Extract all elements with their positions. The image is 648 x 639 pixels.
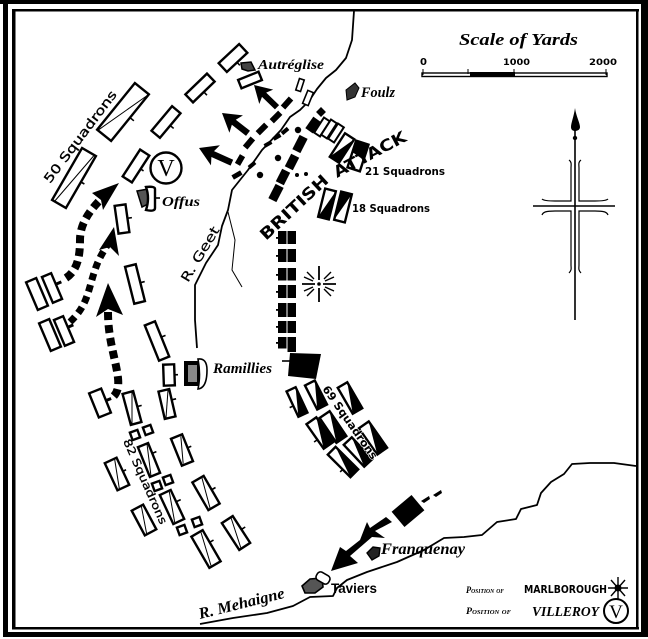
attack arrows: left wing	[66, 183, 123, 397]
village: Offus	[137, 187, 201, 211]
marker: Villeroy position: V	[157, 156, 175, 182]
label: R. Geet: R. Geet	[179, 224, 223, 285]
British squadrons: 69 squadrons	[283, 380, 387, 480]
village: Offus: Offus	[162, 195, 201, 210]
legend: VILLEROY	[532, 605, 600, 620]
scale of yards: 1000	[503, 58, 530, 68]
label: R. Mehaigne: R. Mehaigne	[196, 585, 286, 623]
label: 69 squadrons: 69 Squadrons	[320, 383, 380, 462]
marker: Villeroy position	[150, 152, 182, 184]
legend: Position of	[466, 585, 504, 595]
river Geet	[179, 11, 354, 348]
village: Taviers: Taviers	[331, 580, 377, 596]
British infantry columns	[276, 231, 296, 352]
village: Foulz: Foulz	[360, 85, 395, 101]
French cavalry: left wing	[26, 204, 178, 417]
label: 82 squadrons: 82 Squadrons	[120, 437, 170, 527]
British squadrons: 18 squadrons	[318, 189, 352, 222]
British attack dashes	[268, 107, 326, 202]
scale of yards: 0	[420, 57, 427, 68]
north arrow	[533, 108, 615, 320]
British centre block	[282, 353, 321, 379]
village: Foulz	[346, 83, 395, 101]
marker: Marlborough position	[302, 266, 336, 302]
legend	[466, 577, 628, 623]
legend: V	[609, 602, 623, 623]
village: Franquenay: Franquenay	[380, 541, 465, 558]
infantry dashes along the Geet	[231, 97, 308, 180]
attack arrows: south	[331, 490, 442, 571]
British squadrons: 21 squadrons	[314, 118, 369, 171]
British south block	[392, 495, 424, 527]
scale of yards: 2000	[589, 58, 617, 68]
label: British attack: ATTACK	[330, 127, 410, 182]
village: Taviers	[302, 571, 377, 596]
small outposts	[296, 79, 313, 106]
attack arrows: north	[195, 78, 284, 173]
artillery squares	[130, 425, 202, 535]
French cavalry: northern line	[123, 44, 250, 184]
legend: MARLBOROUGH	[524, 583, 607, 596]
village: Ramillies: Ramillies	[212, 361, 272, 377]
label: 50 squadrons: 50 Squadrons	[40, 87, 120, 186]
river Mehaigne	[196, 463, 636, 624]
label: 18 squadrons: 18 Squadrons	[352, 202, 430, 215]
label: British attack	[256, 127, 410, 244]
village: Ramillies	[184, 359, 272, 389]
village: Autréglise	[238, 58, 324, 88]
50 squadrons blocks	[52, 83, 153, 210]
village: Autréglise: Autréglise	[257, 58, 324, 73]
scale of yards: Scale of Yards	[459, 30, 578, 49]
scale of yards	[420, 30, 617, 76]
82 squadrons blocks	[105, 388, 254, 568]
label: British attack: BRITISH	[256, 171, 332, 244]
legend: Position of	[466, 606, 511, 616]
skirmishers	[421, 490, 442, 503]
label: 21 squadrons: 21 Squadrons	[365, 165, 445, 178]
